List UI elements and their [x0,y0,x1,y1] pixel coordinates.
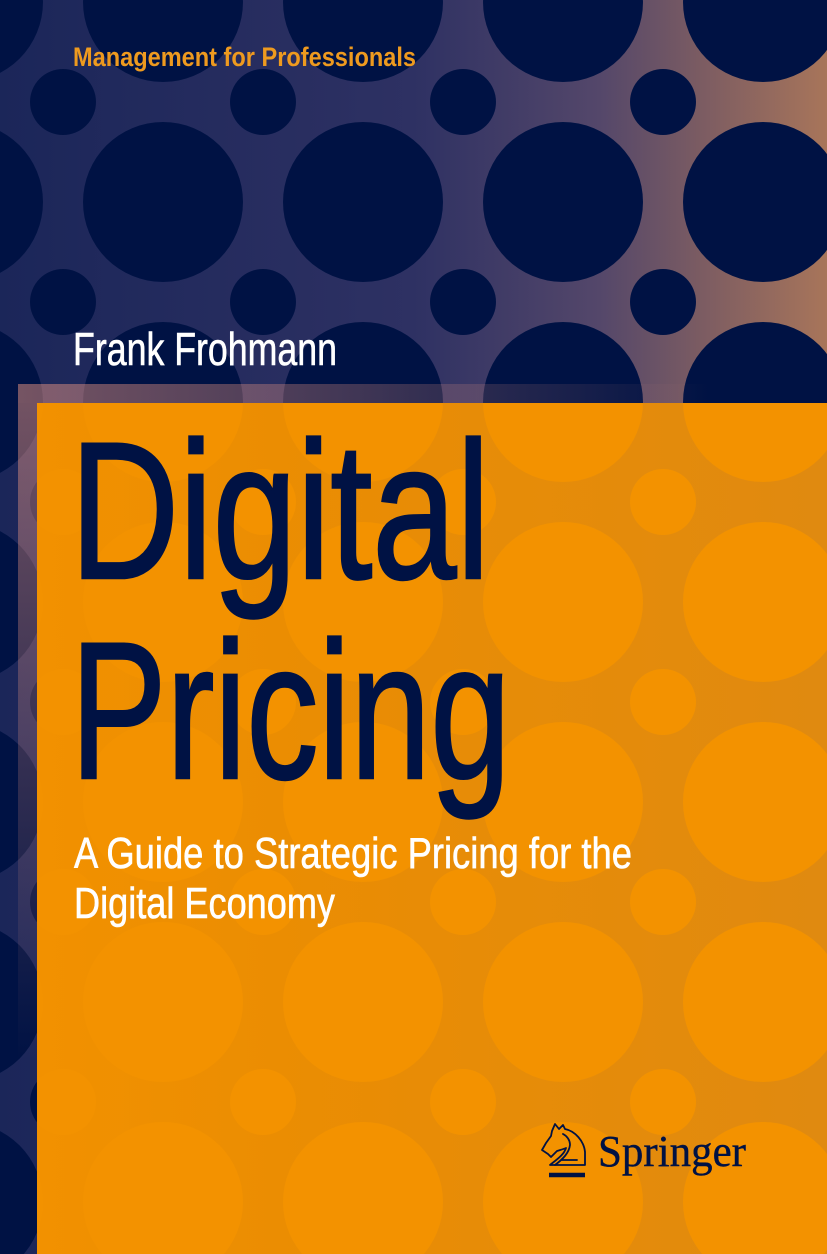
author: Frank Frohmann [73,323,337,375]
translucent frame around orange panel [18,384,827,1254]
title line 1: Digital [70,402,490,620]
panel: orange title panel with dot pattern [37,403,827,1254]
title line 2: Pricing [70,602,510,820]
series name: Management for Professionals [73,42,416,72]
subtitle [74,829,632,928]
subtitle line 2: Digital Economy [74,879,335,928]
title [70,402,510,820]
Springer wordmark: Springer [598,1127,746,1176]
icon: Springer horse logo [542,1124,585,1175]
subtitle line 1: A Guide to Strategic Pricing for the [74,829,632,878]
